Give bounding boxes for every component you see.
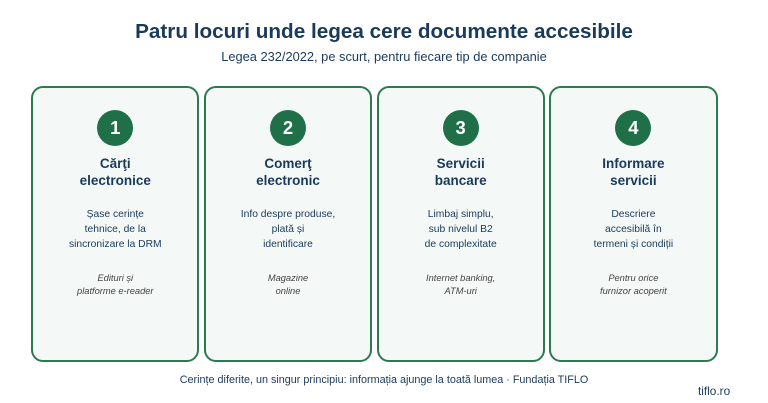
panel: card 3 (377, 86, 545, 362)
number badge 4 (615, 110, 651, 146)
number badge 1 (97, 110, 133, 146)
card 1 audience: Edituri și (97, 273, 133, 283)
number badge 3: 3 (456, 117, 466, 138)
card 3 heading: bancare (435, 173, 487, 188)
card 2 description: identificare (263, 239, 313, 250)
card 1 heading (80, 156, 151, 188)
card 2 description: Info despre produse, (241, 209, 335, 220)
title: Patru locuri unde legea cere documente accesibile (135, 20, 633, 43)
card 3 audience: Internet banking, (426, 273, 495, 283)
card 2 heading (256, 156, 320, 188)
card 4 audience (600, 273, 667, 296)
card 1 description (69, 209, 162, 250)
panel: card 2 (204, 86, 372, 362)
card 4 audience: furnizor acoperit (600, 286, 667, 296)
card 1 heading: electronice (80, 173, 151, 188)
number badge 1: 1 (110, 117, 120, 138)
card 4 description: termeni și condiții (594, 239, 673, 250)
card 1 description: tehnice, de la (85, 224, 146, 235)
card 4 heading: servicii (610, 173, 657, 188)
card 3 description: Limbaj simplu, (428, 209, 494, 220)
footer note: Cerințe diferite, un singur principiu: informația ajunge la toată lumea · Fundația TIFLO (180, 374, 588, 386)
card 1 audience: platforme e-reader (77, 286, 154, 296)
card 2 audience: online (276, 286, 300, 296)
card 4 audience: Pentru orice (608, 273, 658, 283)
number badge 3 (443, 110, 479, 146)
card 4 description: Descriere (611, 209, 655, 220)
card 3 description: sub nivelul B2 (429, 224, 493, 235)
number badge 2 (270, 110, 306, 146)
card 3 heading: Servicii (437, 156, 485, 171)
card 4 description (594, 209, 673, 250)
card 2 heading: Comerţ (264, 156, 312, 171)
card 3 description: de complexitate (425, 239, 497, 250)
website label: tiflo.ro (698, 384, 730, 398)
card 3 heading (435, 156, 487, 188)
card 2 description: plată și (272, 224, 304, 235)
card 1 description: sincronizare la DRM (69, 239, 162, 250)
panel: card 1 (31, 86, 199, 362)
card 4 heading (602, 156, 665, 188)
card 4 description: accesibilă în (605, 224, 662, 235)
number badge 4: 4 (628, 117, 639, 138)
card 3 description (425, 209, 497, 250)
card 4 heading: Informare (602, 156, 665, 171)
panel: card 4 (549, 86, 718, 362)
subtitle: Legea 232/2022, pe scurt, pentru fiecare tip de companie (221, 49, 547, 64)
card 3 audience: ATM-uri (444, 286, 477, 296)
number badge 2: 2 (283, 117, 293, 138)
card 3 audience (426, 273, 495, 296)
card 2 description (241, 209, 335, 250)
card 2 heading: electronic (256, 173, 320, 188)
card 2 audience: Magazine (268, 273, 308, 283)
card 1 heading: Cărţi (100, 156, 131, 171)
card 1 description: Șase cerințe (87, 209, 144, 220)
card 2 audience (268, 273, 308, 296)
card 1 audience (76, 273, 154, 296)
